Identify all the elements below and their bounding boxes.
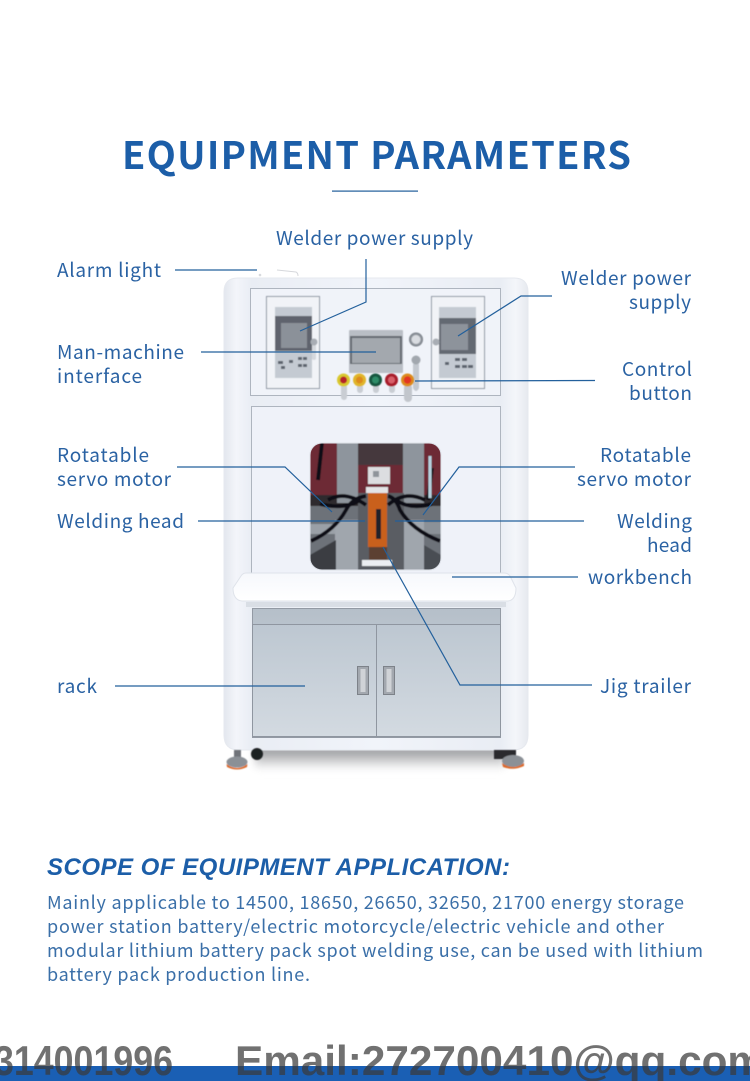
scope description: modular lithium battery pack spot welding use, can be used with lithium — [47, 937, 703, 963]
scope description — [47, 889, 703, 987]
pressure gauge and knob — [410, 333, 422, 391]
label: rotatable servo motor left: servo motor — [57, 465, 172, 492]
scope description: Mainly applicable to 14500, 18650, 26650, 32650, 21700 energy storage — [47, 889, 684, 915]
label: control button: Control — [622, 355, 692, 382]
label: welder power supply right: supply — [629, 288, 691, 315]
label: jig trailer: Jig trailer — [600, 672, 692, 699]
door handles — [358, 666, 394, 694]
man-machine touch screen — [349, 330, 403, 373]
scope heading: SCOPE OF EQUIPMENT APPLICATION: — [47, 854, 510, 881]
workbench — [233, 573, 516, 601]
footer contact text — [0, 1037, 750, 1081]
label: alarm light: Alarm light — [57, 256, 161, 283]
label: rack: rack — [57, 672, 98, 699]
floor shadow — [255, 746, 505, 770]
title underline — [332, 190, 418, 192]
alarm light — [259, 270, 298, 276]
feet and casters — [226, 748, 524, 770]
label: welder power supply right — [561, 264, 692, 315]
machine cabinet — [224, 278, 528, 750]
right welder window — [432, 296, 484, 388]
left cabinet door — [252, 624, 376, 736]
lower rack frame — [252, 608, 500, 738]
machine illustration — [224, 270, 528, 770]
label: rotatable servo motor left: Rotatable — [57, 441, 149, 468]
middle panel frame — [252, 406, 500, 578]
label: rotatable servo motor right — [577, 441, 692, 492]
label: control button: button — [629, 379, 692, 406]
label: welding head right: Welding — [617, 507, 692, 534]
scope description: battery pack production line. — [47, 961, 310, 987]
label: man-machine interface: interface — [57, 362, 142, 389]
label: man-machine interface: Man-machine — [57, 338, 184, 365]
label: rotatable servo motor left — [57, 441, 172, 492]
label: man-machine interface — [57, 338, 184, 389]
label: welder power supply right: Welder power — [561, 264, 692, 291]
label: rotatable servo motor right: Rotatable — [600, 441, 691, 468]
right cabinet door — [376, 624, 500, 736]
label: welding head right: head — [647, 531, 692, 558]
label: welding head left: Welding head — [57, 507, 184, 534]
title: EQUIPMENT PARAMETERS — [122, 125, 631, 180]
label: welding head right — [617, 507, 692, 558]
label: workbench: workbench — [588, 563, 692, 590]
label: welder power supply top: Welder power supply — [276, 224, 473, 251]
left welder window — [266, 296, 320, 388]
scope description: power station battery/electric motorcycle/electric vehicle and other — [47, 913, 665, 939]
control buttons — [337, 374, 414, 402]
control panel frame — [250, 288, 500, 402]
callout lines — [115, 259, 595, 686]
welding chamber photo — [310, 443, 441, 570]
label: control button — [622, 355, 692, 406]
label: rotatable servo motor right: servo motor — [577, 465, 692, 492]
footer bar — [0, 1066, 750, 1081]
